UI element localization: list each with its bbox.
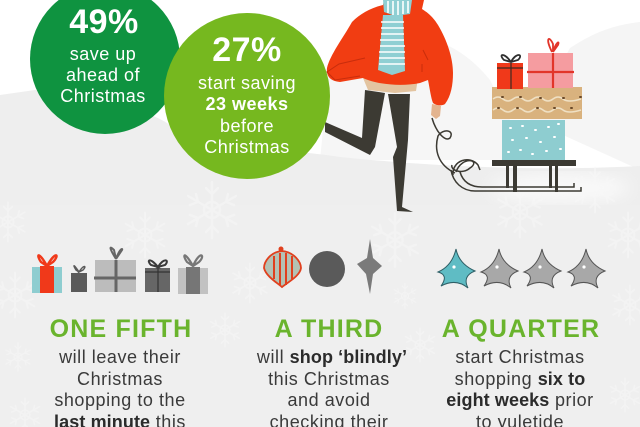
stat circle: 27%: 27%: [212, 31, 282, 69]
stat circle: 27%: start saving: [198, 73, 296, 93]
rope: [432, 118, 480, 175]
tan gift: [492, 87, 582, 119]
text: a quarter: start Christmas: [455, 347, 585, 367]
text: a quarter: [446, 347, 594, 427]
scarf: [378, 0, 412, 75]
text: a third: [256, 347, 407, 427]
icon row: three baubles: [264, 239, 382, 294]
illustration: person in red jacket: [325, 0, 453, 212]
icon: striped bauble: [264, 246, 301, 287]
stat circle: 49%: ahead of: [66, 65, 141, 85]
hand: [431, 104, 441, 119]
stat circle: 49%: save up: [70, 44, 136, 64]
text: a quarter: eight weeks prior: [446, 390, 594, 410]
red gift: [497, 55, 523, 89]
stat circle: 27%: before: [220, 116, 274, 136]
decorative snowflakes: [0, 168, 640, 427]
text: a third: will shop ‘blindly’: [256, 347, 407, 367]
legs: [325, 90, 413, 212]
text: one fifth: [54, 347, 186, 427]
text: one fifth: will leave their: [58, 347, 181, 367]
text: a third: this Christmas: [268, 369, 390, 389]
stat circle: 27%: [164, 13, 330, 179]
text: a quarter: shopping six to: [455, 369, 585, 389]
stat circle: 49%: 49%: [69, 3, 139, 41]
red jacket: [327, 0, 453, 105]
pink gift: [527, 39, 574, 88]
sweater hem: [363, 78, 418, 93]
heading: one fifth: ONE FIFTH: [50, 315, 192, 343]
stat circle: 49%: Christmas: [60, 86, 146, 106]
icon row: four stars: [438, 249, 605, 288]
text: a third: and avoid: [287, 390, 371, 410]
heading: a quarter: A QUARTER: [442, 315, 600, 343]
sled frame: [492, 160, 576, 192]
sled runners: [451, 170, 581, 191]
icon: dark ball: [309, 251, 345, 287]
stat circle: 27%: Christmas: [204, 137, 290, 157]
stat circle: 27%: 23 weeks: [205, 94, 289, 114]
text: one fifth: Christmas: [77, 369, 163, 389]
blue gift: [502, 120, 565, 160]
text: one fifth: shopping to the: [54, 390, 186, 410]
illustration: sled with gifts: [432, 39, 582, 192]
icon: spike ornament: [357, 239, 382, 294]
stat circle: 49%: [30, 0, 180, 134]
heading: a third: A THIRD: [275, 315, 383, 343]
icon row: five gifts: [32, 248, 208, 294]
